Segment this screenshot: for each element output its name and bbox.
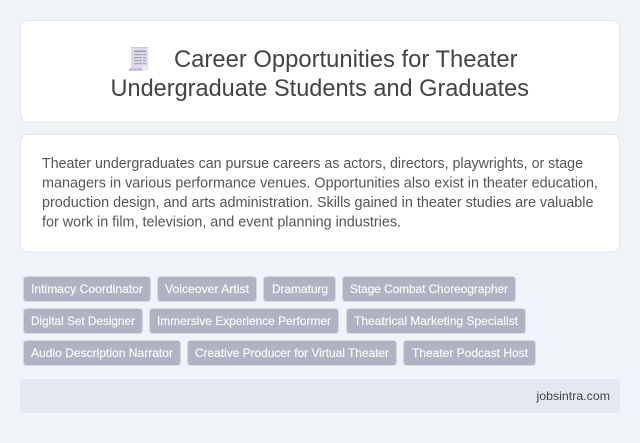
title: Undergraduate Students and Graduates: [110, 75, 529, 102]
description text: [42, 155, 598, 230]
tag: Immersive Experience Performer: Immersive Experience Performer: [157, 314, 331, 328]
panel: description: [20, 134, 620, 252]
tag: Dramaturg: [264, 276, 336, 302]
description text: production design, and arts administration. Skills gained in theater studies are valuable: [42, 194, 594, 211]
icon: scroll script: [128, 47, 148, 71]
tag: Voiceover Artist: [158, 276, 256, 302]
tag: Intimacy Coordinator: [24, 276, 150, 302]
tag: Creative Producer for Virtual Theater: [188, 340, 396, 366]
tag: Digital Set Designer: Digital Set Designer: [31, 314, 135, 328]
tag: Creative Producer for Virtual Theater: Creative Producer for Virtual Theater: [195, 346, 389, 360]
tag: Stage Combat Choreographer: Stage Combat Choreographer: [350, 282, 508, 296]
tag: Stage Combat Choreographer: [342, 276, 516, 302]
footer bar: [20, 379, 620, 413]
tag: Intimacy Coordinator: Intimacy Coordinator: [31, 282, 143, 296]
tag: Audio Description Narrator: Audio Description Narrator: [31, 346, 173, 360]
tag: Theatrical Marketing Specialist: Theatrical Marketing Specialist: [354, 314, 519, 328]
tag: Immersive Experience Performer: [150, 308, 338, 334]
tag: Theatrical Marketing Specialist: [346, 308, 526, 334]
description text: managers in various performance venues. Opportunities also exist in theater education,: [42, 174, 598, 192]
footer source text: jobsintra.com: [535, 389, 610, 403]
description text: for work in film, television, and event planning industries.: [42, 214, 401, 230]
title: [110, 46, 529, 102]
tag: Dramaturg: Dramaturg: [272, 282, 328, 296]
tag: Theater Podcast Host: [404, 340, 536, 366]
tag: Audio Description Narrator: [24, 340, 180, 366]
title: Career Opportunities for Theater: [174, 46, 518, 73]
description text: Theater undergraduates can pursue careers as actors, directors, playwrights, or stage: [42, 155, 583, 172]
tag: Theater Podcast Host: Theater Podcast Host: [412, 346, 529, 360]
tag list: [24, 276, 536, 366]
panel: header: [20, 20, 620, 122]
tag: Digital Set Designer: [24, 308, 142, 334]
tag: Voiceover Artist: Voiceover Artist: [165, 282, 250, 296]
